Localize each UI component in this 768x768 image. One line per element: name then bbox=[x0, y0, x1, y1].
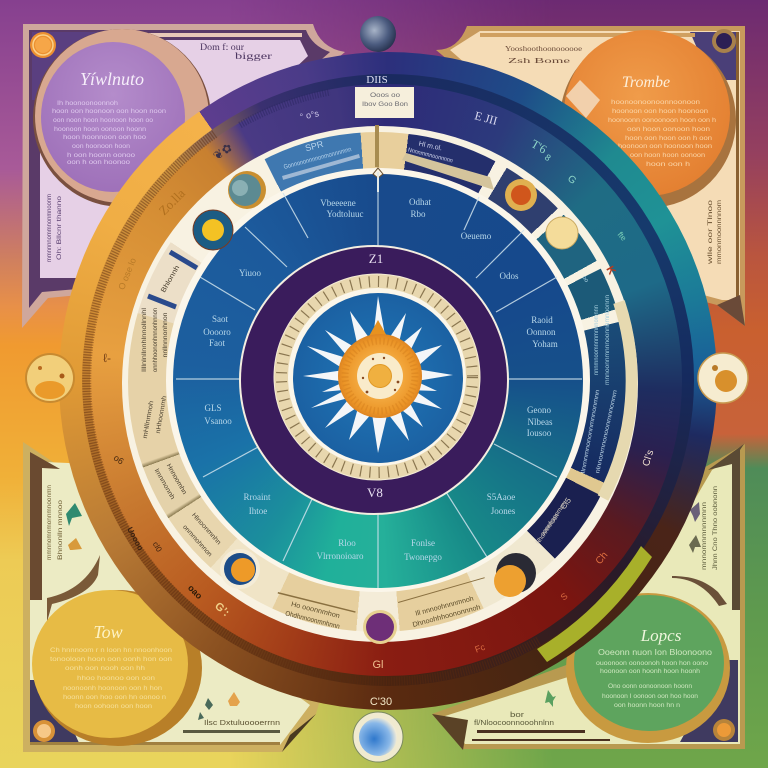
sector label east lower: Nlbeas bbox=[528, 417, 553, 427]
text block: hoon oohoon oon hoon bbox=[75, 704, 152, 710]
text block: bottom-left note: Ilsc Dxtuluoooerrnn bbox=[204, 718, 280, 727]
text block: hoonoon oon hoonoon hoon bbox=[618, 144, 712, 150]
icon: earth planet on ring bbox=[228, 171, 266, 209]
navy lower tile text: Nhonnmnoon bbox=[535, 512, 561, 546]
text block: top-right note: Zsh Bome bbox=[508, 56, 571, 65]
text block: bottom-right note: fl/Nloocoonnooohnlnn bbox=[474, 720, 554, 727]
navy lower tile text: oonnhsnnmon bbox=[539, 500, 568, 538]
hatch marks on left of wheel bbox=[87, 133, 538, 681]
sector label north: Odhat bbox=[409, 197, 431, 207]
band labels: G bbox=[565, 173, 578, 187]
icon: orange planet on ring bbox=[220, 549, 260, 589]
sector label north-east 2: Odos bbox=[499, 271, 519, 281]
band labels: Uoooo bbox=[125, 526, 145, 552]
sector dividers bbox=[176, 172, 582, 588]
bottom tile text: Ohdhnnoonmnhnnn bbox=[284, 610, 340, 631]
band labels: ° o°s bbox=[299, 108, 320, 122]
band labels: G’: bbox=[212, 600, 232, 619]
left tile text: nHhoonnmh bbox=[155, 395, 168, 434]
band labels: oao bbox=[186, 583, 205, 601]
panel: orange circle Trombe bbox=[560, 30, 736, 208]
text block: oonh oon nooh oon hh bbox=[65, 666, 145, 672]
top cream label box: Ooos oo bbox=[370, 93, 401, 99]
band labels: Ch bbox=[594, 550, 610, 567]
text block: top-right vertical note: mmonmoonnnnom bbox=[716, 200, 723, 264]
text block: ouoonoon oonoonoh hoon hon oono bbox=[596, 660, 708, 667]
icon: corner medallion top-right bbox=[712, 29, 736, 53]
panel: purple circle Yiwlnuto bbox=[33, 29, 211, 207]
right tile text: nnnmnoomnnnmnnnomnnn bbox=[594, 305, 600, 375]
navy tile text: Nnnnmmnoonnnnn bbox=[407, 148, 453, 165]
icon: yellow planet on ring bbox=[193, 210, 233, 250]
band labels: Cl’s bbox=[641, 449, 656, 468]
band labels: fte bbox=[616, 230, 629, 243]
inner coloured wheel band bbox=[90, 84, 682, 676]
band labels bbox=[103, 74, 656, 708]
left tile text: Illlnlnllnnhlnnollnnhl bbox=[141, 307, 148, 372]
sector label north-west 2: Yiuoo bbox=[239, 268, 261, 278]
left tile text: nnllnnnonhnon bbox=[162, 312, 169, 358]
text block bbox=[52, 101, 166, 166]
panel: yellow circle Tow bbox=[32, 590, 202, 746]
text block: bottom-right vertical note: Jhnn Cno Thno oobnonn bbox=[712, 486, 719, 570]
sector label west upper: Saot bbox=[212, 314, 228, 324]
band labels: 8 bbox=[543, 152, 553, 163]
left tile text: Bhlonnh bbox=[160, 264, 181, 294]
text block: Ono oonn oonoonoon hoonn bbox=[608, 683, 692, 690]
blue tile text: Gonnononnnnonmonnnmnn bbox=[283, 146, 353, 171]
sector label south left: Vlrronoioaro bbox=[316, 551, 364, 561]
sector label east upper bbox=[526, 315, 558, 349]
text block bbox=[596, 648, 713, 709]
sector label north-east 1: Oeuemo bbox=[461, 231, 492, 241]
title: Yíwlnuto bbox=[80, 69, 144, 89]
hatched wheel ring bbox=[82, 74, 694, 686]
text block: Ih hoonoonoonnoh bbox=[57, 101, 118, 107]
icon: left planet bbox=[25, 353, 75, 403]
sector label north-west: Yodtoluuc bbox=[326, 209, 364, 219]
icon: corner medallion top-left bbox=[30, 32, 56, 58]
right tile text: mnnoonnmnnnoonnnmnnonnn bbox=[605, 295, 611, 385]
icon: bottom planet bbox=[353, 712, 403, 762]
navy lower tile text: Cl5 bbox=[559, 496, 573, 511]
text block: h oon hoonn oonoo bbox=[67, 153, 136, 159]
left tile text: lmnmonnh bbox=[153, 468, 176, 501]
text block: hoonoon I oonoon oon hoo hoon bbox=[602, 693, 698, 700]
sector label west upper: Ooooro bbox=[203, 327, 231, 337]
sector label east lower bbox=[527, 405, 553, 438]
navy lower tile text bbox=[535, 496, 573, 546]
text block: bottom-left vertical note: mmnnomnmonnmnoonmn bbox=[46, 485, 53, 560]
zodiac cell ring bbox=[128, 132, 628, 632]
band labels: Zo.lla bbox=[156, 186, 188, 218]
icon: dark orange planet on ring bbox=[494, 553, 536, 597]
band labels: E JII bbox=[473, 108, 499, 128]
sector label south-west: Rroaint bbox=[244, 492, 271, 502]
panel: top-right frame bbox=[436, 26, 745, 326]
dark hatch marks on top of wheel bbox=[240, 92, 330, 125]
top cream label box: Ibov Goo Bon bbox=[362, 102, 408, 108]
top cream label box bbox=[355, 87, 414, 118]
band labels: C'30 bbox=[370, 696, 392, 708]
band labels: S bbox=[559, 591, 570, 602]
text block: Ch hnnnoom r n loon hn nnoonhoon bbox=[50, 648, 172, 654]
icon: red planet on ring bbox=[505, 179, 537, 211]
icon: corner medallion bottom-left bbox=[33, 720, 55, 742]
right tile text: nlnnonmnonoonmnnonnm bbox=[595, 390, 619, 474]
white inner ring bbox=[166, 168, 590, 592]
text block: hoon oon hoonoon oon hoon noon bbox=[52, 109, 166, 115]
left tile text: Hlnoonmnhn bbox=[190, 512, 222, 547]
blue sector wheel bbox=[173, 174, 583, 588]
text block: top-left vertical note: Oh: Bllcnr thanno bbox=[56, 196, 63, 260]
panel: bottom-left frame bbox=[23, 442, 320, 752]
sector label east upper: Yoham bbox=[532, 339, 558, 349]
right tile text bbox=[580, 275, 619, 474]
text block: hoonoonn oonoonoon hoon oon h bbox=[608, 118, 716, 124]
icon: corner medallion bottom-right bbox=[713, 719, 735, 741]
panel: bottom-right frame bbox=[432, 444, 745, 750]
sun rays bbox=[303, 296, 453, 453]
cream ladder on right cells bbox=[603, 302, 632, 498]
text block: top-right vertical note bbox=[707, 199, 723, 266]
text block: top-left note: Dom f: our bbox=[200, 42, 244, 52]
band labels: ❦✿ bbox=[210, 140, 235, 163]
panel: top-left frame bbox=[22, 24, 345, 328]
sector label north: Rbo bbox=[410, 209, 426, 219]
icon: purple planet on ring bbox=[363, 610, 397, 644]
sector label south-east bbox=[487, 492, 516, 516]
sector label south-east: Joones bbox=[491, 506, 516, 516]
text block: hoon hoonnoon oon hoo bbox=[63, 135, 147, 141]
icon: right planet bbox=[698, 353, 748, 403]
sector label north-west bbox=[320, 198, 364, 219]
left tile text: mHllnmnoh bbox=[142, 400, 155, 439]
text block bbox=[50, 648, 172, 710]
white cell ring bbox=[122, 126, 638, 642]
band labels: Gl bbox=[372, 659, 384, 671]
bottom tile text: Dhnoohhhoononnnoh bbox=[412, 604, 481, 629]
sector label south left: Rloo bbox=[338, 538, 356, 548]
navy stripes on left cells bbox=[148, 252, 197, 307]
text block: oon h oon hoonoo bbox=[67, 160, 131, 166]
title: Lopcs bbox=[640, 626, 682, 645]
text block: oon hoon oonoon hoon bbox=[627, 127, 710, 133]
blue tile text: SPR bbox=[304, 139, 325, 153]
cell tile labels bbox=[141, 125, 619, 631]
sector label east lower: Iousoo bbox=[527, 428, 552, 438]
sector label east upper: Raoid bbox=[531, 315, 553, 325]
sector label south-west: Ihtoe bbox=[249, 506, 267, 516]
band labels: T'6 bbox=[529, 137, 549, 156]
text block: bottom-right vertical note bbox=[701, 486, 719, 570]
icon: leaf marks bbox=[66, 503, 240, 720]
panel: green circle Lopcs bbox=[566, 593, 730, 743]
bottom tile text: Ill nnnoohnnnmnoh bbox=[415, 595, 475, 618]
top band label: DIIS bbox=[366, 74, 388, 86]
text block: hoonn oon hoo oon hn oonoo n bbox=[63, 695, 166, 701]
sector label south right bbox=[404, 538, 442, 562]
text block: top-left vertical note: mmnnnnommnonmnoonm bbox=[46, 194, 53, 262]
band labels: K bbox=[603, 264, 618, 277]
text block: tonooloon hoon oon oonh hon oon bbox=[50, 657, 172, 663]
icon: leaf marks bbox=[545, 502, 701, 707]
left tile text: onnhhoononhnnonhnnon bbox=[152, 308, 159, 372]
text block: hoon oon hoon oon h oon bbox=[625, 136, 712, 142]
text block: bottom-left vertical note bbox=[46, 485, 64, 560]
text block: bottom-right note bbox=[474, 712, 554, 727]
sector label south left bbox=[316, 538, 364, 561]
text block: oon hoonn hoon hn n bbox=[614, 702, 680, 709]
sector label south right: Fonlse bbox=[411, 538, 435, 548]
text block: hoonoon oon hoonh hoon hoonh bbox=[600, 668, 700, 675]
left tile text: Hnnoomhn bbox=[165, 463, 188, 496]
band labels: ℓ- bbox=[103, 351, 111, 365]
navy tile text: Hl m.ol. bbox=[418, 141, 443, 152]
cream top tile emblem bbox=[373, 125, 383, 192]
text block: hoon oon h bbox=[646, 162, 690, 168]
sector label north-west: Vbeeeene bbox=[320, 198, 356, 208]
title: Trombe bbox=[622, 74, 670, 91]
ring label top: Z1 bbox=[369, 251, 383, 266]
text block: hhoo hoonoo oon oon bbox=[77, 676, 155, 682]
right tile text: Ilnmnmnononnmnnonmnn bbox=[581, 389, 601, 474]
text block: bottom-left vertical note: Bhnonlln mnnoo bbox=[57, 500, 64, 560]
text block: top-left note bbox=[200, 42, 272, 61]
left tile text: onmmohnnon bbox=[181, 524, 213, 558]
sector label west upper: Faot bbox=[209, 338, 225, 348]
text block: hoonoon oon hoon hoonoon bbox=[612, 109, 708, 115]
text block: top-left vertical note bbox=[46, 194, 63, 262]
sector label west lower bbox=[204, 403, 232, 426]
text block: top-right note: Yooshoothoonoooooe bbox=[505, 44, 583, 53]
text block: top-right vertical note: wlle oor Tlnoo bbox=[707, 199, 714, 266]
text block: top-left note: bigger bbox=[235, 51, 272, 61]
sector label west lower: GLS bbox=[204, 403, 222, 413]
band labels: O ose lo bbox=[116, 256, 138, 291]
sector label east lower: Geono bbox=[527, 405, 551, 415]
band labels: Fc bbox=[474, 642, 487, 655]
text block bbox=[608, 100, 716, 168]
text block: top-right note bbox=[505, 44, 583, 65]
band labels: o6 bbox=[112, 453, 126, 467]
band labels: cl0 bbox=[151, 540, 164, 554]
text block: oon hoon hoon oonoon bbox=[630, 153, 705, 159]
text block: oon noon hoon hoonoon hoon oo bbox=[53, 118, 154, 124]
text block: Ooeonn nuon Ion Bloonoono bbox=[598, 648, 713, 657]
purple inner ring bbox=[239, 245, 509, 515]
sector label east upper: Oonnon bbox=[526, 327, 556, 337]
ladder ring bbox=[274, 274, 480, 480]
sector label south-west bbox=[244, 492, 271, 516]
icon: sun bbox=[338, 320, 422, 418]
outer wheel band bbox=[59, 52, 717, 710]
sector label south-east: S5Aaoe bbox=[487, 492, 515, 502]
icon: top planet bbox=[360, 16, 396, 52]
icon: cream planet on ring bbox=[546, 217, 578, 249]
right tile text: oo bbox=[580, 275, 590, 284]
sector label west upper bbox=[203, 314, 231, 348]
bottom tile text: Ho ooonnmhon bbox=[290, 601, 341, 620]
text block: hoonoon hoon oonoon hoonn bbox=[54, 127, 146, 133]
ring label bottom: V8 bbox=[367, 485, 383, 500]
text block: oon hoonoon hoon bbox=[72, 144, 130, 150]
sector label south right: Twonepgo bbox=[404, 552, 442, 562]
text block: hoonoonoonoonnoonoon bbox=[611, 100, 700, 106]
olive band segment bbox=[537, 546, 652, 662]
sector labels bbox=[203, 197, 558, 562]
text block: noonoonh hoonoon oon h hon bbox=[63, 686, 162, 692]
left tile text bbox=[141, 264, 222, 558]
title: Tow bbox=[93, 622, 123, 642]
sector label north bbox=[409, 197, 431, 219]
bottom tile text bbox=[278, 577, 485, 631]
navy tile text bbox=[402, 141, 494, 190]
text block: bottom-right vertical note: mnnomnmnnnmnn bbox=[701, 502, 708, 570]
text block: bottom-right note: bor bbox=[510, 712, 525, 719]
blue tile text bbox=[282, 139, 360, 180]
sector label west lower: Vsanoo bbox=[204, 416, 232, 426]
